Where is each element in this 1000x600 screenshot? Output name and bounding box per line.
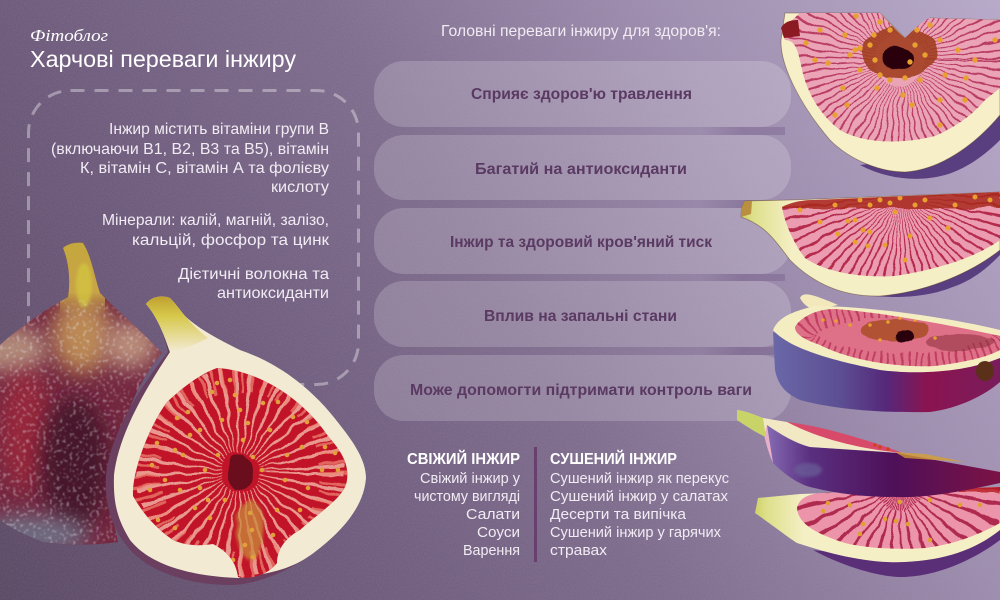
divider xyxy=(534,447,537,562)
title block xyxy=(30,26,297,72)
nutrients text: (включаючи В1, В2, В3 та В5), вітамін xyxy=(51,141,329,158)
icon: fig slice 5 xyxy=(755,487,1000,577)
text block: fresh figs: чистому вигляді xyxy=(414,488,520,505)
heading: health benefits: Головні переваги інжиру для здоров'я: xyxy=(441,23,721,40)
nutrients text: Інжир містить вітаміни групи В xyxy=(109,121,329,138)
icon: fig slice 2 xyxy=(740,192,1000,297)
text block: fresh figs: Варення xyxy=(463,542,520,559)
text block: fresh figs: Салати xyxy=(466,506,520,523)
benefit 4 xyxy=(374,281,791,347)
nutrients text: кальцій, фосфор та цинк xyxy=(132,232,330,249)
nutrients text xyxy=(51,121,330,302)
nutrients text: Дієтичні волокна та xyxy=(178,266,329,283)
text block: fresh figs: Соуси xyxy=(477,524,520,541)
icon: cut fig xyxy=(106,296,366,585)
benefit 4: Вплив на запальні стани xyxy=(484,308,677,325)
text block: dried figs xyxy=(550,449,729,559)
text block: dried figs: Сушений інжир у гарячих xyxy=(550,524,721,541)
icon: whole fig xyxy=(0,240,170,555)
benefit 3: Інжир та здоровий кров'яний тиск xyxy=(450,234,713,251)
benefit 1 xyxy=(374,61,791,127)
text block: dried figs: стравах xyxy=(550,542,608,559)
nutrients text: кислоту xyxy=(271,179,329,196)
nutrients text: Мінерали: калій, магній, залізо, xyxy=(102,212,329,229)
text block: fresh figs: СВІЖИЙ ІНЖИР xyxy=(407,449,520,468)
benefit 5 xyxy=(374,355,791,421)
nutrients text: К, вітамін С, вітамін А та фолієву xyxy=(80,160,329,177)
title block: Фітоблог xyxy=(30,26,108,45)
text block: dried figs: Десерти та випічка xyxy=(550,506,687,523)
benefit 1: Сприяє здоров'ю травлення xyxy=(471,86,692,103)
panel: benefit list xyxy=(374,61,791,421)
icon: fig slice 4 xyxy=(737,410,1000,497)
icon: fig slice 1 xyxy=(781,0,1000,179)
text block: dried figs: СУШЕНИЙ ІНЖИР xyxy=(550,449,677,468)
text block: fresh figs: Свіжий інжир у xyxy=(420,470,520,487)
text block: dried figs: Сушений інжир у салатах xyxy=(550,488,728,505)
text block: dried figs: Сушений інжир як перекус xyxy=(550,470,729,487)
benefit 2: Багатий на антиоксиданти xyxy=(475,161,687,178)
nutrients text: антиоксиданти xyxy=(217,285,329,302)
icon: fig slice 3 xyxy=(773,294,1000,412)
title block: Харчові переваги інжиру xyxy=(30,46,297,72)
benefit 5: Може допомогти підтримати контроль ваги xyxy=(410,382,752,399)
dashed frame xyxy=(28,90,358,384)
text block: fresh figs xyxy=(407,449,520,559)
benefit 2 xyxy=(374,135,791,200)
benefit 3 xyxy=(374,208,791,274)
